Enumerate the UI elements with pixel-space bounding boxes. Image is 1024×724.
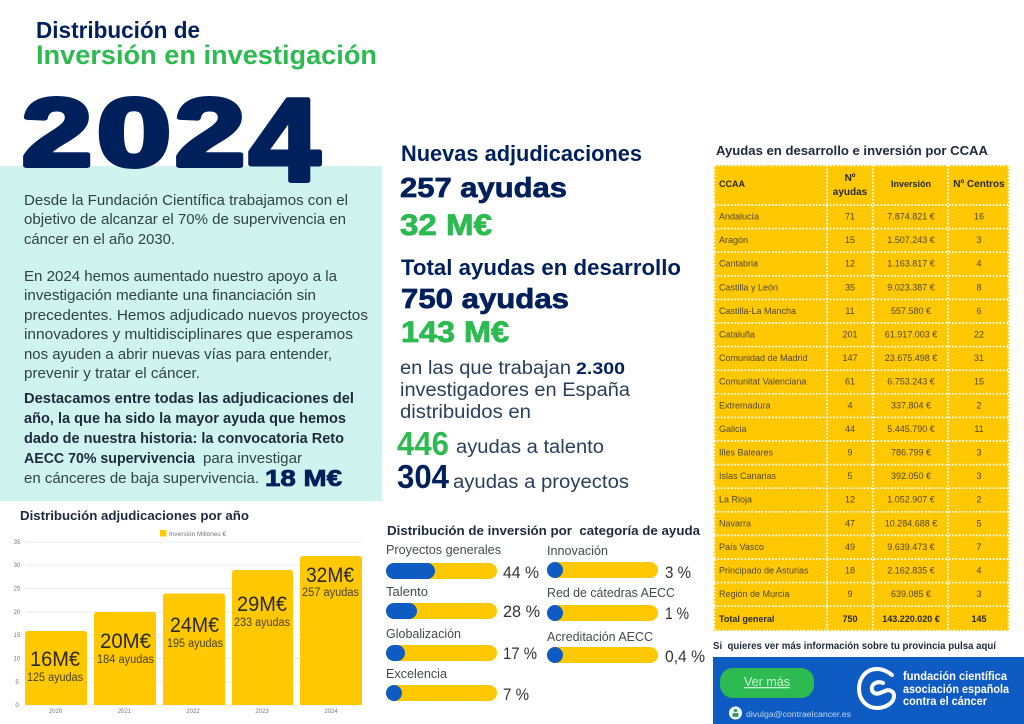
title: Inversión en investigación: [36, 40, 377, 70]
category: Globalización: Globalización: [386, 627, 461, 641]
bar 2020: 16M€: [30, 648, 80, 671]
bar 2024: 32M€: [306, 564, 354, 587]
table rows: 6: [976, 306, 982, 316]
heading: bar chart: Distribución adjudicaciones por año: [20, 508, 249, 523]
text block: researchers: distribuidos en: [400, 402, 531, 423]
table rows: 11: [845, 306, 855, 316]
text block: highlighted call: para investigar: [203, 451, 302, 467]
text block: highlighted call: AECC 70% supervivencia: [24, 451, 196, 467]
text block: researchers: investigadores en España: [400, 380, 630, 401]
y axis: 5: [15, 680, 19, 686]
table rows: Extremadura: [719, 400, 771, 410]
panel: new grants and total: 32 M€: [400, 209, 492, 242]
text block: highlighted call: año, la que ha sido la mayor ayuda que hemos: [24, 411, 346, 427]
category: Acreditación AECC: 0,4 %: [665, 647, 705, 666]
year 2024: 0: [97, 80, 171, 186]
table rows: 12: [845, 495, 855, 505]
table: grants per autonomous community: [714, 165, 1009, 631]
logo: foundation: asociación española: [903, 682, 1009, 696]
bar 2021: [94, 612, 156, 715]
panel: new grants and total: Total ayudas en desarrollo: [401, 255, 681, 280]
table rows: 3: [976, 235, 982, 245]
table rows: 1.163.817 €: [887, 259, 935, 269]
table rows: Navarra: [719, 518, 751, 528]
category: Red de cátedras AECC: 1 %: [665, 604, 689, 623]
text block: intro paragraph: En 2024 hemos aumentado nuestro apoyo a la: [24, 269, 338, 285]
bar chart: grants per year: [14, 530, 362, 715]
table rows: 2.162.835 €: [887, 566, 935, 576]
bar 2022: 195 ayudas: [167, 638, 223, 650]
logo: foundation: contra el cáncer: [903, 694, 987, 708]
category: Globalización: [386, 627, 537, 663]
table header: Inversión: [891, 179, 931, 189]
y axis: [14, 540, 21, 709]
table rows: 1.052.907 €: [887, 495, 935, 505]
text block: researchers: 2.300: [576, 359, 625, 378]
category: Acreditación AECC: Acreditación AECC: [547, 630, 653, 644]
text block: intro paragraph: Desde la Fundación Científica trabajamos con el: [24, 193, 348, 209]
bar 2023: 2023: [255, 709, 269, 715]
bar 2023: [232, 570, 293, 715]
table rows: 5: [976, 518, 982, 528]
table header: ayudas: [833, 187, 868, 198]
table rows: 10.284.688 €: [885, 518, 937, 528]
table header: Nº: [845, 173, 856, 184]
table total row: 145: [971, 614, 987, 624]
table rows: 23.675.498 €: [885, 353, 937, 363]
table rows: Galicia: [719, 424, 747, 434]
panel: new grants and total: Nuevas adjudicaciones: [401, 141, 642, 166]
table total row: Total general: [719, 614, 774, 624]
table rows: 15: [974, 377, 984, 387]
table rows: Aragón: [719, 235, 748, 245]
table rows: 4: [847, 400, 853, 410]
text block: researchers: en las que trabajan: [400, 358, 571, 379]
table rows: 147: [842, 353, 858, 363]
category: Talento: Talento: [386, 585, 428, 599]
button: Ver más: Ver más: [744, 674, 790, 689]
y axis: 15: [14, 633, 21, 639]
panel: intro background: [0, 166, 382, 501]
table rows: 4: [976, 259, 982, 269]
category: Red de cátedras AECC: [547, 586, 689, 623]
text block: highlighted call: 18 M€: [265, 465, 342, 491]
bar 2023: 233 ayudas: [234, 617, 290, 629]
heading: category distribution: Distribución de inversión por categoría de ayuda: [387, 523, 701, 538]
table rows: 9.639.473 €: [887, 542, 935, 552]
y axis: 20: [14, 610, 21, 616]
text block: intro paragraph: innovadores y multidisciplinares que esperamos: [24, 327, 353, 343]
category: Globalización: 17 %: [503, 644, 537, 663]
table rows: Castilla y León: [719, 282, 778, 292]
chart legend: Inversión Millones €: [169, 532, 227, 538]
table rows: 9: [847, 448, 853, 458]
bar 2024: 2024: [324, 709, 338, 715]
table rows: 2: [976, 400, 982, 410]
category: Red de cátedras AECC: Red de cátedras AECC: [547, 586, 675, 600]
category: Proyectos generales: [386, 543, 539, 582]
title: Distribución de: [36, 17, 200, 43]
panel: new grants and total: 143 M€: [401, 316, 509, 349]
table rows: 61: [845, 377, 855, 387]
category: Talento: 28 %: [503, 602, 540, 621]
text block: highlighted call: en cánceres de baja supervivencia.: [24, 471, 259, 487]
table rows: Castilla-La Mancha: [719, 306, 796, 316]
text block: researchers: [400, 358, 630, 423]
table rows: 8: [976, 282, 982, 292]
table rows: 35: [845, 282, 855, 292]
table rows: 18: [845, 566, 855, 576]
y axis: 10: [14, 656, 21, 662]
text block: intro paragraph: precedentes. Hemos adjudicado nuevos proyectos: [24, 308, 368, 324]
table rows: Cantabria: [719, 259, 758, 269]
text block: highlighted call: Destacamos entre todas las adjudicaciones del: [24, 391, 354, 407]
bar 2024: [300, 556, 362, 715]
table rows: Islas Canarias: [719, 471, 777, 481]
text block: intro paragraph: prevenir y tratar el cáncer.: [24, 366, 200, 382]
text block: highlighted call: dado de nuestra historia: la convocatoria Reto: [24, 431, 344, 447]
panel: new grants and total: 750 ayudas: [401, 283, 569, 314]
stat: project grants: ayudas a proyectos: [453, 472, 629, 493]
table total row: 750: [842, 614, 858, 624]
stat: talent grants: 446: [397, 425, 449, 462]
table rows: 1.507.243 €: [887, 235, 935, 245]
category: Excelencia: [386, 667, 529, 704]
text block: intro paragraph: cáncer en el año 2030.: [24, 232, 175, 248]
table rows: 9: [847, 589, 853, 599]
table rows: 201: [842, 330, 858, 340]
table total row: [719, 614, 987, 624]
category: Innovación: 3 %: [665, 563, 691, 582]
table rows: Cataluña: [719, 330, 755, 340]
progress bars: category distribution: [386, 543, 705, 704]
y axis: 0: [15, 703, 19, 709]
table rows: 6.753.243 €: [887, 377, 935, 387]
category: Excelencia: Excelencia: [386, 667, 447, 681]
table rows: Principado de Asturias: [719, 566, 809, 576]
stat: project grants: 304: [397, 458, 450, 495]
table rows: [719, 212, 984, 599]
text block: highlighted call: [24, 391, 354, 491]
table rows: La Rioja: [719, 495, 752, 505]
text block: intro paragraph: [24, 193, 368, 382]
text: province call to action: Si quieres ver más información sobre tu provincia pulsa aquí: [713, 640, 997, 652]
table total row: 143.220.020 €: [882, 614, 940, 624]
table rows: 44: [845, 424, 855, 434]
table rows: 7: [976, 542, 982, 552]
table rows: Región de Murcia: [719, 589, 790, 599]
panel: footer: [713, 657, 1024, 724]
bar 2021: 20M€: [100, 630, 151, 653]
table rows: 22: [974, 330, 984, 340]
bar 2020: [25, 631, 87, 715]
table rows: 12: [845, 259, 855, 269]
table rows: 5: [847, 471, 853, 481]
category: Innovación: Innovación: [547, 544, 608, 558]
bar 2021: 2021: [118, 709, 132, 715]
table rows: 3: [976, 448, 982, 458]
category: Acreditación AECC: [547, 630, 705, 666]
table rows: 9.023.387 €: [887, 282, 935, 292]
table header: Nº Centros: [953, 179, 1005, 190]
text block: intro paragraph: objetivo de alcanzar el 70% de supervivencia en: [24, 212, 346, 228]
title: [36, 17, 377, 70]
table rows: 61.917.003 €: [885, 330, 937, 340]
button: Ver más: [720, 668, 814, 698]
table rows: 337.804 €: [891, 400, 931, 410]
year 2024: 2: [22, 80, 92, 186]
category: Proyectos generales: 44 %: [503, 563, 539, 582]
bar 2024: 257 ayudas: [302, 587, 359, 599]
category: Innovación: [547, 544, 691, 582]
stat: project grants: [397, 458, 629, 495]
table rows: Comunidad de Madrid: [719, 353, 808, 363]
bar 2021: 184 ayudas: [97, 654, 154, 666]
table rows: País Vasco: [719, 542, 764, 552]
table rows: 11: [974, 424, 984, 434]
logo: foundation: [859, 669, 1009, 708]
table rows: 15: [845, 235, 855, 245]
bar 2020: 125 ayudas: [27, 672, 83, 684]
y axis: 30: [14, 563, 21, 569]
table rows: 16: [974, 212, 984, 222]
table header: [719, 173, 1005, 198]
table rows: 31: [974, 353, 984, 363]
table rows: 3: [976, 471, 982, 481]
chart legend: [160, 530, 227, 538]
table rows: 4: [976, 566, 982, 576]
icon: contact person: [729, 706, 742, 720]
bar 2022: 2022: [186, 709, 200, 715]
table rows: 5.445.790 €: [887, 424, 935, 434]
logo: foundation: fundación científica: [903, 669, 1007, 683]
category: Proyectos generales: Proyectos generales: [386, 543, 501, 557]
y axis: 35: [14, 540, 21, 546]
category: Talento: [386, 585, 540, 621]
table rows: 71: [845, 212, 855, 222]
table rows: 49: [845, 542, 855, 552]
table rows: 47: [845, 518, 855, 528]
year 2024: [22, 74, 320, 206]
bar 2022: 24M€: [170, 614, 219, 637]
stat: talent grants: [397, 425, 604, 462]
table rows: Andalucía: [719, 212, 759, 222]
table rows: Illes Baleares: [719, 448, 774, 458]
panel: new grants and total: [400, 141, 681, 349]
table rows: 392.050 €: [891, 471, 931, 481]
text block: intro paragraph: nos ayuden a abrir nuevas vías para entender,: [24, 347, 332, 363]
bar 2020: 2020: [49, 709, 63, 715]
text block: intro paragraph: investigación mediante una financiación sin: [24, 288, 316, 304]
table header: CCAA: [719, 179, 745, 189]
table rows: 7.874.821 €: [887, 212, 935, 222]
table rows: 3: [976, 589, 982, 599]
table rows: Comunitat Valenciana: [719, 377, 806, 387]
bar 2022: [163, 594, 225, 715]
text: email: divulga@contraelcancer.es: [746, 710, 851, 719]
table rows: 2: [976, 495, 982, 505]
heading: table: Ayudas en desarrollo e inversión por CCAA: [716, 143, 989, 158]
year 2024: 4: [249, 74, 320, 206]
category: Excelencia: 7 %: [503, 685, 529, 704]
bar 2023: 29M€: [237, 593, 287, 616]
stat: talent grants: ayudas a talento: [456, 437, 604, 458]
table rows: 786.799 €: [891, 448, 931, 458]
table rows: 557.580 €: [891, 306, 931, 316]
table rows: 639.085 €: [891, 589, 931, 599]
y axis: 25: [14, 586, 21, 592]
panel: new grants and total: 257 ayudas: [400, 172, 567, 203]
year 2024: 2: [175, 80, 245, 186]
